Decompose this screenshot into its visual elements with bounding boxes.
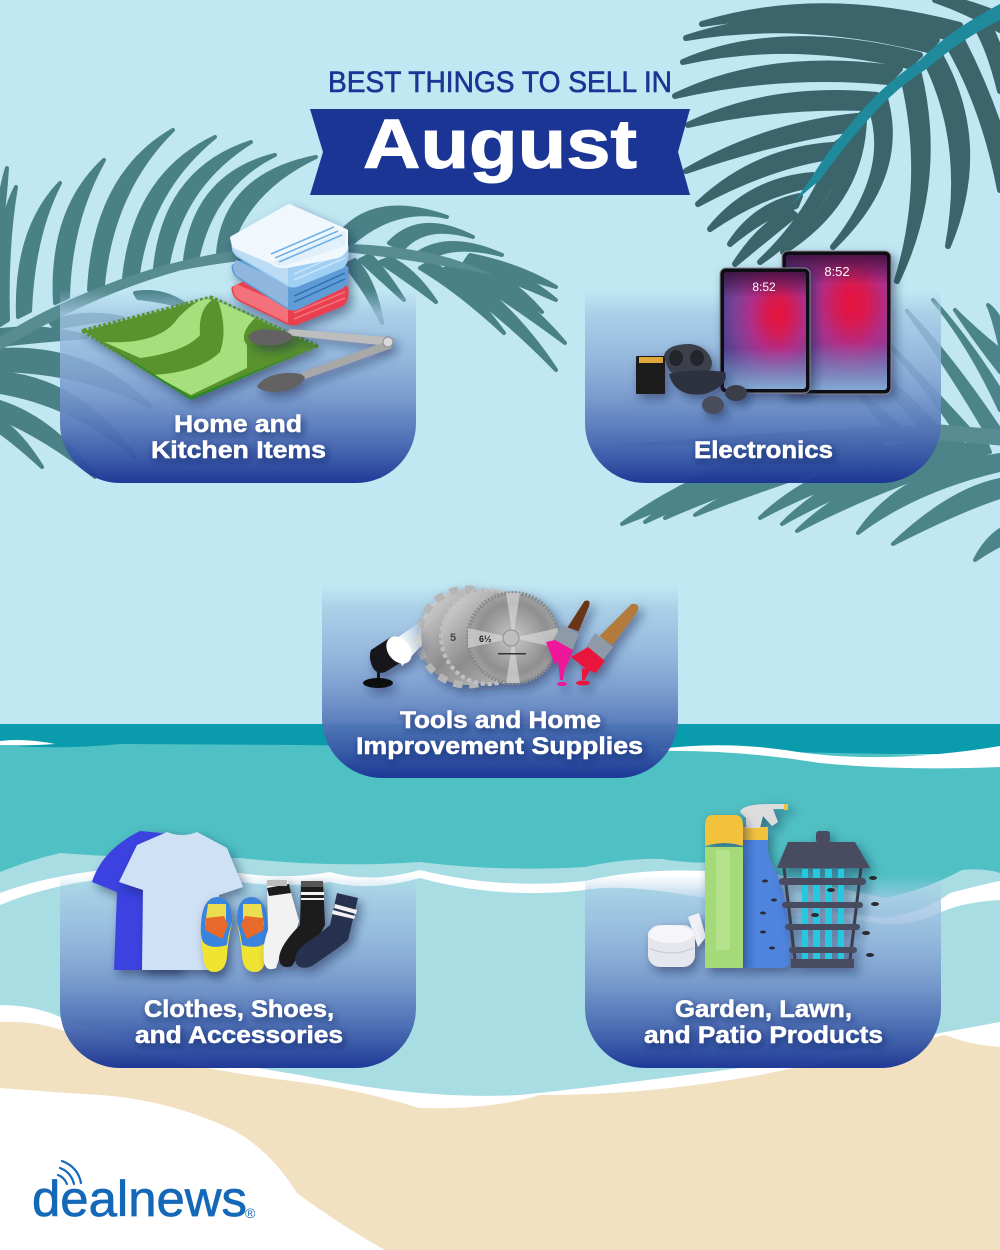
- icon: small tablet: 8:52: [752, 280, 776, 294]
- label: clothes, shoes and accessories: and Accessories: [135, 1022, 343, 1049]
- panel: clothes, shoes and accessories: [60, 831, 416, 1068]
- icon: saw blades: 6½: [479, 634, 492, 644]
- icon: towel stack: [232, 206, 347, 324]
- icon: spray bottle: [740, 804, 790, 968]
- icon: blue t-shirt: [92, 831, 180, 970]
- icon: chlorine tablets: [648, 913, 706, 967]
- label: garden, lawn and patio products: and Patio Products: [644, 1022, 883, 1049]
- icon: green canister: [705, 815, 743, 968]
- panel: electronics: [585, 251, 941, 483]
- icon: mosquitoes: [760, 876, 879, 957]
- icon: large tablet: [782, 251, 891, 394]
- icon: green rug: [84, 298, 316, 400]
- icon: large tablet: 8:52: [824, 264, 850, 279]
- panel: home and kitchen items: [60, 206, 416, 483]
- icon: socks: [264, 879, 358, 969]
- icon: flip flops: [201, 897, 268, 972]
- label: home and kitchen items: [151, 411, 326, 464]
- label: tools and home improvement supplies: Improvement Supplies: [356, 733, 643, 760]
- icon: saw blades: 5: [450, 632, 456, 644]
- label: tools and home improvement supplies: Tools and Home: [400, 707, 601, 734]
- palm stem: top right: [785, 4, 1000, 213]
- label: home and kitchen items: Home and: [174, 411, 302, 438]
- label: tools and home improvement supplies: [356, 707, 643, 760]
- icon: memory card: [636, 356, 665, 394]
- panel: garden, lawn and patio products: [585, 804, 941, 1068]
- icon: tongs: [248, 329, 393, 392]
- icon: earbuds and case: [664, 344, 747, 414]
- icon: paint brushes: [546, 602, 637, 686]
- palm frond: left: [0, 130, 565, 477]
- icon: bug zapper lamp: [777, 831, 870, 968]
- banner: August: [310, 105, 690, 195]
- palm frond: bottom right: [620, 300, 1000, 560]
- label: garden, lawn and patio products: Garden, Lawn,: [675, 996, 852, 1023]
- icon: flashlight: [363, 622, 422, 688]
- label: home and kitchen items: Kitchen Items: [151, 437, 326, 464]
- icon: light t-shirt: [119, 832, 243, 970]
- logo: dealnews: dealnews: [32, 1171, 247, 1227]
- title: best things to sell in: BEST THINGS TO SELL IN: [328, 66, 672, 99]
- banner: August: August: [363, 105, 637, 183]
- icon: small tablet: [720, 268, 810, 393]
- palm frond: top right: [675, 0, 1000, 281]
- logo: dealnews: ®: [245, 1205, 256, 1221]
- label: electronics: Electronics: [694, 437, 833, 464]
- icon: saw blades: [419, 589, 558, 685]
- label: clothes, shoes and accessories: Clothes, Shoes,: [144, 996, 334, 1023]
- label: clothes, shoes and accessories: [135, 996, 343, 1049]
- panel: tools and home improvement supplies: [322, 585, 678, 778]
- label: garden, lawn and patio products: [644, 996, 883, 1049]
